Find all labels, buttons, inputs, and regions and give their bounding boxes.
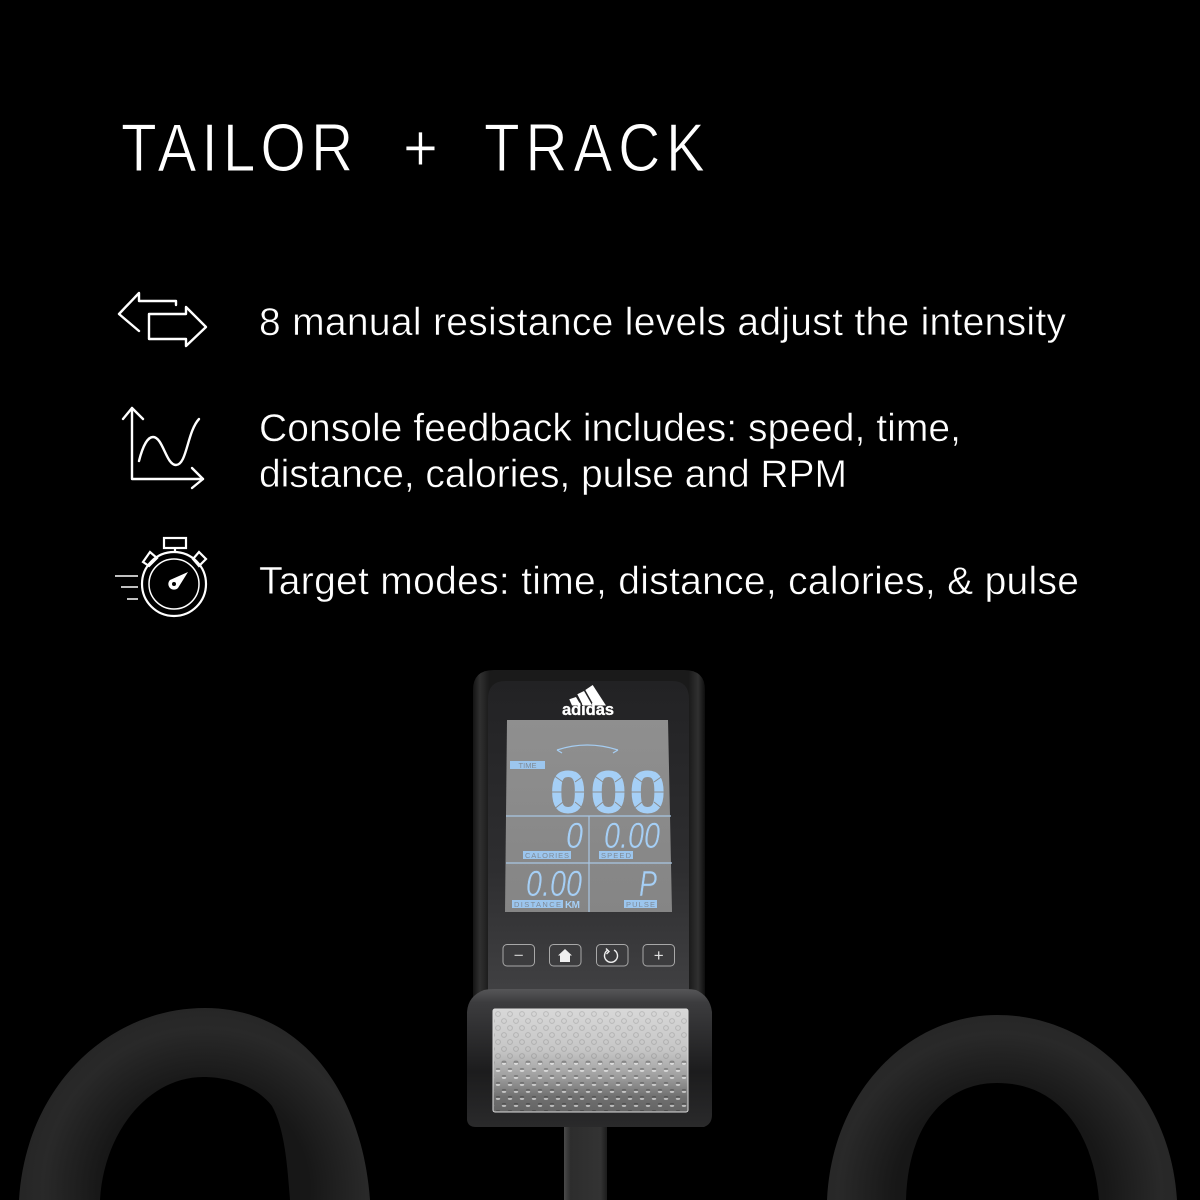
- feature text: resistance levels: 8 manual resistance levels adjust the intensity: [259, 301, 1066, 344]
- brushed metal grip plate: [493, 1009, 688, 1112]
- button: minus: [503, 944, 534, 966]
- LCD pulse readout: [624, 863, 657, 909]
- button: minus: −: [514, 946, 524, 965]
- LCD screen: [505, 720, 672, 912]
- title: TAILOR: [121, 111, 353, 186]
- feature text: target modes: Target modes: time, distance, calories, & pulse: [259, 560, 1079, 603]
- LCD distance readout: DISTANCE: [514, 900, 561, 909]
- LCD calories readout: CALORIES: [525, 851, 569, 860]
- LCD divider lines: [506, 816, 672, 912]
- title: TRACK: [484, 111, 705, 186]
- icon: resistance arrows: [119, 293, 206, 346]
- LCD time readout: 000: [550, 759, 666, 826]
- icon: line graph: [123, 408, 203, 488]
- button: plus: +: [654, 946, 664, 965]
- LCD distance readout: KM: [565, 900, 580, 911]
- LCD pulse readout: P: [639, 863, 657, 904]
- button: plus: [643, 944, 674, 966]
- LCD distance readout: 0.00: [526, 863, 582, 904]
- console buttons: [503, 944, 674, 966]
- title: [121, 109, 705, 186]
- console bezel: [473, 670, 705, 1000]
- left handlebar: [19, 1008, 370, 1200]
- console post: [564, 1125, 607, 1200]
- adidas logo: adidas: [562, 701, 614, 719]
- LCD speed readout: SPEED: [601, 851, 632, 860]
- LCD calories readout: [523, 817, 583, 860]
- LCD pulse readout: PULSE: [626, 900, 655, 909]
- LCD time readout: TIME: [519, 761, 536, 770]
- icon: stopwatch: [115, 538, 206, 616]
- feature text: console feedback: Console feedback includes: speed, time,: [259, 407, 961, 450]
- title: +: [403, 109, 438, 186]
- button: reset: [596, 944, 628, 966]
- LCD distance readout: [512, 863, 582, 911]
- right handlebar: [827, 1015, 1177, 1200]
- adidas logo: [562, 685, 614, 719]
- LCD calories readout: 0: [566, 817, 583, 857]
- button: home: [550, 944, 581, 966]
- feature text: console feedback: distance, calories, pulse and RPM: [259, 453, 847, 496]
- feature text: console feedback: [259, 407, 961, 496]
- LCD arc indicator: [557, 745, 618, 753]
- console: [467, 670, 712, 1127]
- LCD speed readout: 0.00: [604, 815, 660, 856]
- console face panel: [488, 681, 689, 995]
- console lower housing: [467, 989, 712, 1127]
